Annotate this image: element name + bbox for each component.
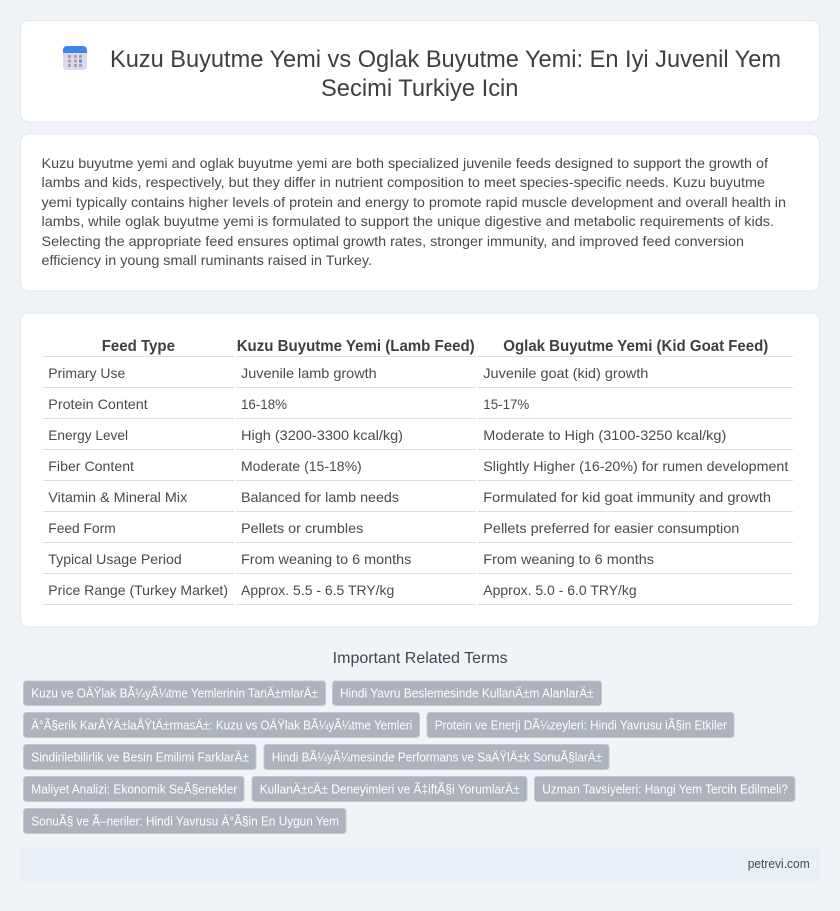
tag	[24, 744, 256, 770]
icon: calendar	[63, 46, 87, 70]
table header row	[102, 338, 768, 355]
tag	[264, 744, 609, 770]
row: protein content: Protein Content	[48, 396, 148, 412]
table header row: Feed Type	[102, 338, 175, 355]
row: feed form: Pellets or crumbles	[241, 520, 363, 536]
intro text block: Kuzu buyutme yemi and oglak buyutme yemi are both specialized juvenile feeds designed to support the growth of	[42, 155, 768, 171]
intro text block	[42, 155, 786, 268]
row: energy level	[48, 427, 726, 443]
row: price range	[48, 582, 637, 598]
intro text block: Selecting the appropriate feed ensures optimal growth rates, stronger immunity, and improved feed conversion	[42, 233, 744, 249]
panel: introduction	[20, 134, 820, 291]
tag: SonuÃ§ ve Ã–neriler: Hindi Yavrusu Ä°Ã§in En Uygun Yem	[31, 814, 339, 828]
tag	[24, 808, 346, 834]
row: primary use: Juvenile goat (kid) growth	[483, 365, 648, 381]
tag: Protein ve Enerji DÃ¼zeyleri: Hindi Yavrusu iÃ§in Etkiler	[435, 718, 728, 732]
tag: Uzman Tavsiyeleri: Hangi Yem Tercih Edilmeli?	[542, 782, 788, 796]
intro text block: efficiency in young small ruminants raised in Turkey.	[42, 252, 372, 268]
tag: Ä°Ã§erik KarÅŸÄ±laÅŸtÄ±rmasÄ±: Kuzu vs OÄŸlak BÃ¼yÃ¼tme Yemleri	[31, 718, 412, 732]
row: energy level: High (3200-3300 kcal/kg)	[241, 427, 403, 443]
table header row: Kuzu Buyutme Yemi (Lamb Feed)	[237, 338, 475, 355]
row: fiber content: Fiber Content	[48, 458, 134, 474]
intro text block: lambs, while oglak buyutme yemi is formulated to support the unique digestive and metabolic requirements of kids.	[42, 213, 774, 229]
row: typical usage period: From weaning to 6 months	[483, 551, 654, 567]
tag: Hindi Yavru Beslemesinde KullanÄ±m AlanlarÄ±	[340, 686, 594, 700]
footer source text: petrevi.com	[748, 857, 810, 871]
tag	[24, 712, 420, 738]
title	[110, 46, 781, 102]
row: feed form: Feed Form	[48, 520, 116, 536]
row: protein content: 15-17%	[483, 396, 529, 412]
row: vitamin and mineral mix: Formulated for kid goat immunity and growth	[483, 489, 771, 505]
row: protein content	[48, 396, 529, 412]
heading: important related terms: Important Related Terms	[333, 650, 508, 667]
tag	[534, 776, 795, 802]
tag	[24, 681, 326, 706]
row: typical usage period: From weaning to 6 months	[241, 551, 411, 567]
title: Kuzu Buyutme Yemi vs Oglak Buyutme Yemi: En Iyi Juvenil Yem	[110, 46, 781, 73]
footer bar	[20, 848, 820, 881]
row: energy level: Energy Level	[48, 427, 128, 443]
row: vitamin and mineral mix: Balanced for lamb needs	[241, 489, 399, 505]
row: energy level: Moderate to High (3100-3250 kcal/kg)	[483, 427, 726, 443]
row: primary use: Juvenile lamb growth	[241, 365, 377, 381]
tag	[427, 712, 734, 738]
tag: Maliyet Analizi: Ekonomik SeÃ§enekler	[31, 782, 238, 796]
tag	[24, 776, 244, 802]
row: vitamin and mineral mix: Vitamin & Mineral Mix	[48, 489, 187, 505]
tag: Sindirilebilirlik ve Besin Emilimi FarklarÄ±	[31, 750, 249, 764]
title: Secimi Turkiye Icin	[321, 75, 518, 102]
row: typical usage period: Typical Usage Period	[48, 551, 182, 567]
intro text block: lambs and kids, respectively, but they differ in nutrient composition to meet species-specific needs. Kuzu buyutme	[42, 174, 765, 190]
row: primary use	[48, 365, 648, 381]
tag: Kuzu ve OÄŸlak BÃ¼yÃ¼tme Yemlerinin TanÄ±mlarÄ±	[31, 686, 318, 700]
row: typical usage period	[48, 551, 654, 567]
row: fiber content: Moderate (15-18%)	[241, 458, 362, 474]
row: price range: Approx. 5.5 - 6.5 TRY/kg	[241, 582, 394, 598]
row: primary use: Primary Use	[48, 365, 126, 381]
row: feed form: Pellets preferred for easier consumption	[483, 520, 739, 536]
row: fiber content	[48, 458, 788, 474]
intro text block: yemi typically contains higher levels of protein and energy to promote rapid muscle development and overall health in	[42, 194, 786, 210]
tag: KullanÄ±cÄ± Deneyimleri ve Ã‡iftÃ§i YorumlarÄ±	[260, 782, 520, 796]
panel: title header	[20, 20, 820, 122]
related term tags	[24, 681, 795, 834]
table header row: Oglak Buyutme Yemi (Kid Goat Feed)	[503, 338, 768, 355]
panel: comparison table	[20, 313, 820, 627]
tag: Hindi BÃ¼yÃ¼mesinde Performans ve SaÄŸlÄ±k SonuÃ§larÄ±	[272, 750, 602, 764]
row: protein content: 16-18%	[241, 396, 287, 412]
row: vitamin and mineral mix	[48, 489, 771, 505]
row: fiber content: Slightly Higher (16-20%) for rumen development	[483, 458, 788, 474]
tag	[332, 681, 602, 706]
row: price range: Price Range (Turkey Market)	[48, 582, 228, 598]
row: price range: Approx. 5.0 - 6.0 TRY/kg	[483, 582, 637, 598]
tag	[252, 776, 527, 802]
row: feed form	[48, 520, 739, 536]
